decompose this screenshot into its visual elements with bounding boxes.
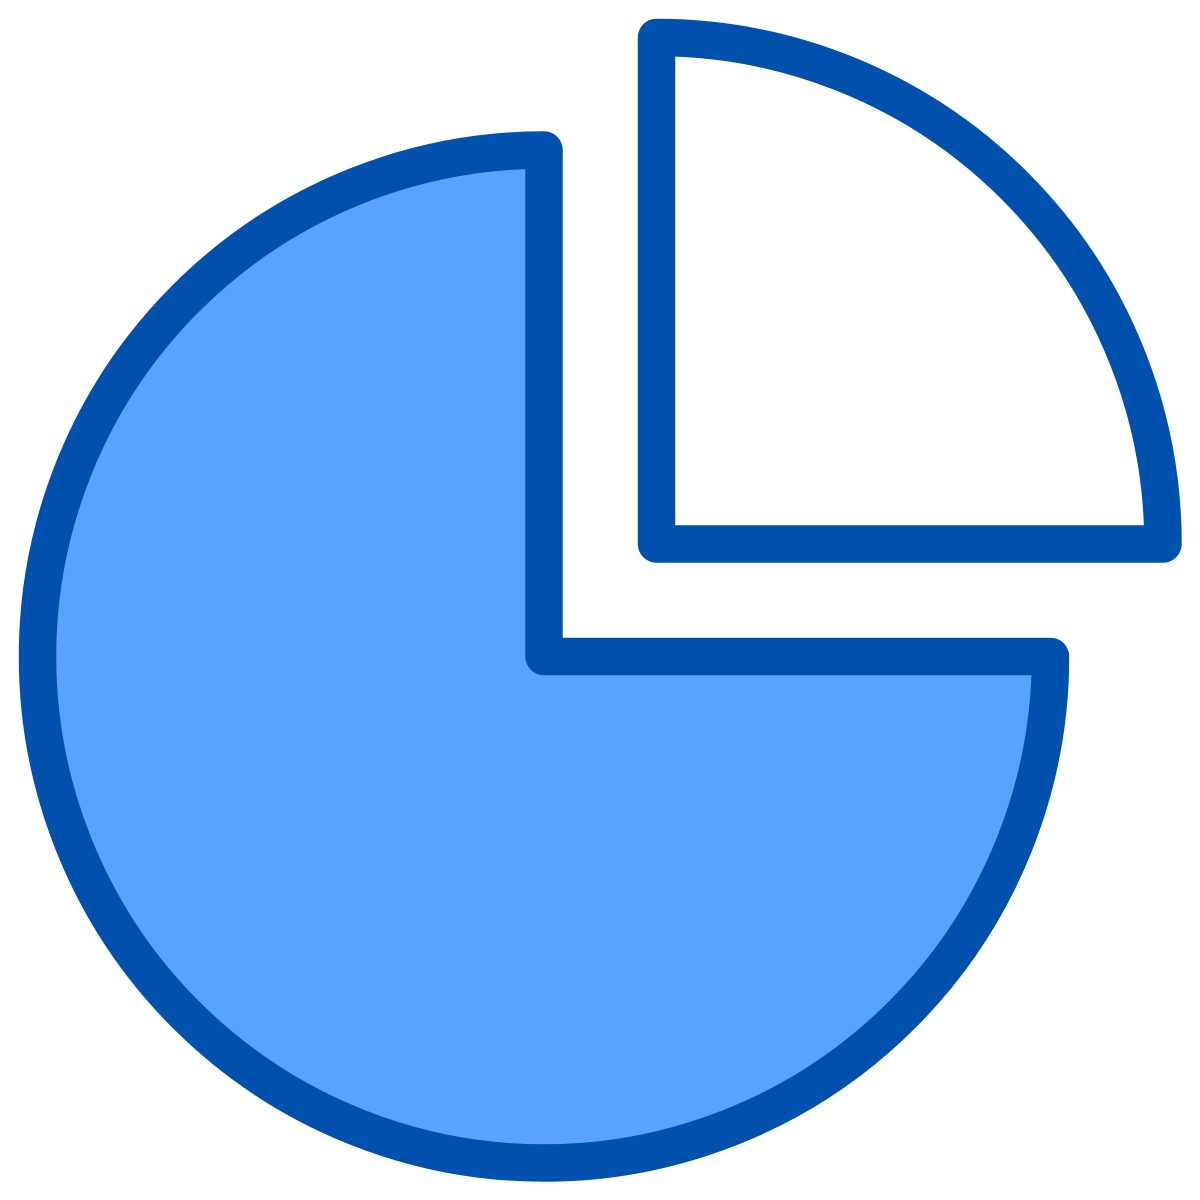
large pie slice [38, 150, 1051, 1163]
detached quarter slice [656, 38, 1163, 544]
